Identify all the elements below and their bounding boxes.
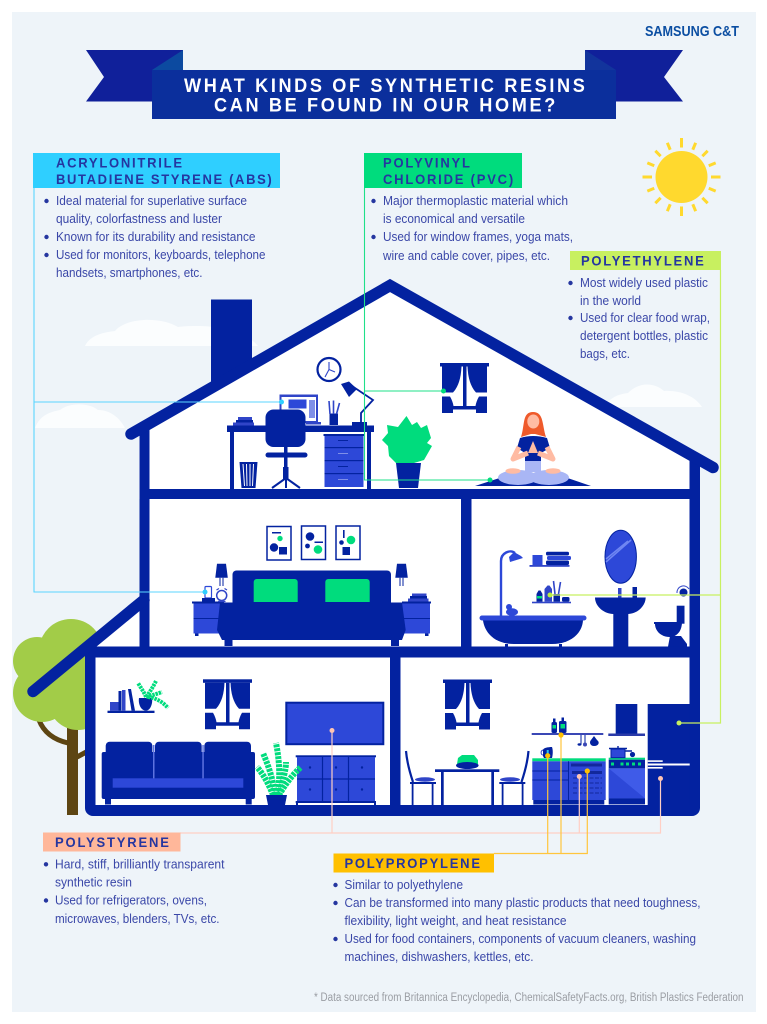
ABS header [33, 153, 280, 188]
hanging utensils [578, 735, 599, 746]
polyethylene bullet list: Most widely used plastic [580, 275, 708, 290]
sink [595, 587, 646, 647]
ABS bullet list: handsets, smartphones, etc. [56, 265, 202, 280]
PVC connector lines [364, 188, 492, 482]
chimney [211, 300, 252, 386]
attic: desk setup [227, 358, 432, 489]
shelf plant [138, 681, 168, 711]
upper bath shelf [530, 552, 571, 567]
cloud: upper left [85, 320, 258, 346]
polyethylene heading: POLYETHYLENE [581, 253, 704, 269]
shirt [517, 436, 550, 461]
kitchen shelf [532, 733, 603, 735]
tree canopy [13, 619, 108, 730]
ABS heading [56, 155, 272, 187]
bed base [217, 602, 406, 646]
polypropylene bullet list: machines, dishwashers, kettles, etc. [344, 949, 534, 964]
living room window [203, 679, 252, 729]
title banner [86, 50, 683, 119]
PVC bullet list: Major thermoplastic material which [383, 193, 568, 208]
room: bathroom [472, 499, 690, 646]
banner right fold [585, 50, 616, 70]
desk lamp [341, 382, 373, 426]
kettle [541, 747, 553, 758]
polystyrene bullet list: Used for refrigerators, ovens, [55, 892, 207, 908]
banner left tail [86, 50, 183, 102]
cooking pot [609, 746, 635, 758]
icon: sun [642, 138, 720, 216]
lower bath shelf with toiletries [532, 581, 571, 603]
lower-left roof triangle [92, 608, 140, 650]
polypropylene bullet list: flexibility, light weight, and heat resistance [344, 913, 566, 928]
polyethylene bullet list: Used for clear food wrap, [580, 310, 710, 325]
main roof [131, 286, 713, 468]
ABS heading: BUTADIENE STYRENE (ABS) [56, 172, 272, 187]
polystyrene bullet list: Hard, stiff, brilliantly transparent [55, 856, 225, 871]
polyethylene bullet list: in the world [580, 293, 641, 308]
polystyrene bullet list [44, 856, 225, 926]
PVC heading: POLYVINYL [383, 155, 470, 171]
title [184, 74, 585, 116]
banner right tail [585, 50, 683, 102]
polystyrene bullet list: synthetic resin [55, 874, 132, 890]
books on desk [233, 417, 254, 426]
stove [609, 758, 645, 804]
counter cabinets [532, 758, 606, 804]
dishwasher panel [571, 764, 602, 793]
bathroom [480, 530, 689, 647]
room: kitchen [400, 658, 690, 805]
bedroom [192, 526, 431, 646]
arms and hands [513, 441, 553, 459]
PVC bullet list: is economical and versatile [383, 211, 525, 226]
person meditating [475, 412, 591, 486]
polyethylene bullet list [568, 275, 710, 361]
ABS bullet list: quality, colorfastness and luster [56, 211, 223, 226]
floor fern [257, 743, 301, 805]
bathtub [480, 616, 586, 646]
polypropylene bullet list [333, 877, 700, 964]
tree [13, 619, 108, 815]
kitchen [406, 680, 690, 805]
polypropylene heading: POLYPROPYLENE [344, 856, 480, 871]
polyethylene header [570, 251, 721, 270]
spice bottles [552, 718, 566, 733]
dining chair right [499, 751, 528, 805]
house walls and floors [85, 430, 700, 816]
sofa [102, 742, 255, 804]
polypropylene bullet list: Used for food containers, components of vacuum cleaners, washing [344, 931, 696, 946]
left lamp [215, 564, 228, 586]
banner main ribbon [152, 70, 616, 119]
cloud: right [603, 384, 702, 407]
left nightstand [192, 602, 224, 636]
toilet [654, 606, 687, 647]
plant: green potted plant [382, 416, 432, 488]
polypropylene connector lines [494, 732, 590, 854]
art frame 2 [302, 526, 326, 560]
banner left fold [152, 50, 183, 70]
lower body [498, 458, 569, 485]
range hood [608, 704, 645, 736]
polyethylene connector lines [548, 270, 720, 726]
attic window [440, 363, 489, 413]
ABS bullet list: Ideal material for superlative surface [56, 193, 247, 208]
room: living room [96, 658, 390, 805]
face [527, 414, 539, 428]
books on nightstand [408, 594, 428, 602]
panel: PVC [364, 153, 573, 482]
right nightstand [402, 602, 431, 636]
polypropylene header [334, 854, 494, 872]
books [110, 689, 135, 711]
brand logo: SAMSUNG C&T [645, 23, 739, 40]
dresser [296, 755, 376, 805]
house [33, 286, 713, 816]
PVC bullet list [371, 193, 573, 263]
rubber duck [506, 604, 518, 616]
PVC heading: CHLORIDE (PVC) [383, 172, 513, 187]
ABS bullet list: Known for its durability and resistance [56, 229, 256, 244]
attic interior [139, 288, 700, 499]
polystyrene header [43, 832, 180, 852]
mirror [605, 530, 636, 583]
desk [227, 426, 374, 489]
ABS bullet list [44, 193, 265, 280]
desk drawers [324, 434, 364, 487]
kitchen window [443, 680, 492, 730]
art frame 1 [267, 526, 291, 560]
hair [521, 412, 546, 437]
television [286, 703, 383, 744]
title: CAN BE FOUND IN OUR HOME? [214, 94, 555, 116]
polyethylene bullet list: bags, etc. [580, 346, 630, 361]
pillow right [325, 579, 370, 602]
polypropylene bullet list: Can be transformed into many plastic products that need toughness, [344, 895, 700, 910]
ABS bullet list: Used for monitors, keyboards, telephone [56, 247, 266, 262]
pillow left [254, 579, 298, 602]
panel: polystyrene [43, 728, 663, 926]
title: WHAT KINDS OF SYNTHETIC RESINS [184, 74, 585, 96]
clock [318, 358, 340, 381]
panel: ABS [33, 153, 284, 594]
polypropylene bullet list: Similar to polyethylene [344, 877, 463, 892]
right lamp [395, 564, 408, 586]
wastebasket [240, 462, 258, 488]
PVC bullet list: wire and cable cover, pipes, etc. [382, 248, 550, 263]
alarm clock [216, 588, 227, 602]
tree trunk and branches [39, 720, 90, 815]
PVC heading [383, 155, 513, 187]
fruit bowl [456, 755, 479, 769]
polystyrene bullet list: microwaves, blenders, TVs, etc. [55, 911, 220, 926]
headboard [232, 570, 391, 606]
yoga mat [475, 478, 591, 486]
lower roof [33, 600, 144, 692]
shower [501, 551, 523, 616]
cloud: left [35, 404, 125, 428]
polystyrene connector lines [180, 728, 663, 833]
polyethylene bullet list: detergent bottles, plastic [580, 328, 708, 343]
panel: polyethylene [548, 251, 721, 726]
chair [266, 410, 308, 488]
toilet paper [677, 586, 689, 596]
wall shelf [108, 711, 154, 713]
art frame 3 [336, 526, 360, 560]
room: bedroom [150, 499, 461, 646]
wall art [267, 526, 360, 560]
dining table [435, 769, 499, 805]
feet [506, 468, 560, 474]
computer [280, 394, 321, 424]
dining chair left [406, 751, 436, 805]
PVC bullet list: Used for window frames, yoga mats, [383, 229, 573, 244]
PVC header [364, 153, 522, 188]
living room [102, 679, 383, 805]
smartphone [202, 586, 215, 602]
ABS heading: ACRYLONITRILE [56, 155, 182, 171]
pencil cup [329, 400, 340, 425]
ABS connector lines [34, 188, 284, 594]
polystyrene heading: POLYSTYRENE [55, 835, 169, 850]
panel: polypropylene [333, 732, 700, 964]
refrigerator [648, 704, 690, 805]
